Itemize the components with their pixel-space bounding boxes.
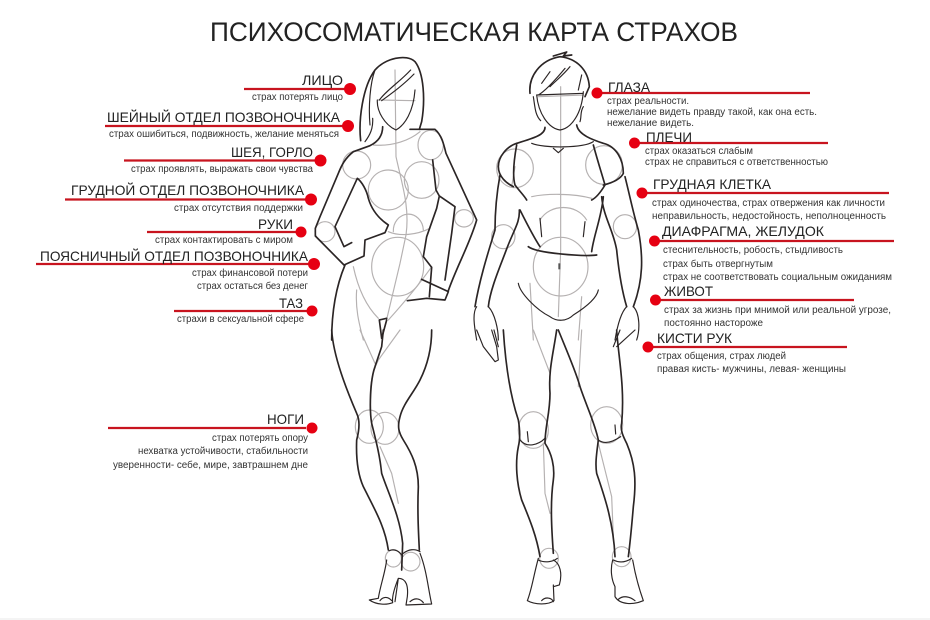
- label: лицо: [244, 72, 356, 103]
- label: руки: [147, 216, 306, 246]
- label: ноги: НОГИ: [267, 411, 304, 427]
- label: плечи: страх не справиться с ответственностью: [645, 157, 828, 168]
- label: диафрагма, желудок: стеснительность, робость, стыдливость: [663, 244, 843, 256]
- label: шейный отдел позвоночника: [105, 108, 354, 140]
- label: руки: страх контактировать с миром: [155, 235, 293, 246]
- label: шея, горло: [124, 144, 326, 175]
- label: поясничный отдел позвоночника: страх остаться без денег: [197, 280, 308, 292]
- label: таз: ТАЗ: [279, 295, 303, 311]
- label: живот: ЖИВОТ: [664, 283, 713, 299]
- label: диафрагма, желудок: страх быть отвергнутым: [663, 258, 773, 270]
- label: диафрагма, желудок: страх не соответствовать социальным ожиданиям: [663, 272, 892, 283]
- label: поясничный отдел позвоночника: страх финансовой потери: [192, 267, 308, 279]
- figure: female body sketch: [315, 58, 477, 605]
- label: глаза: нежелание видеть.: [607, 118, 694, 129]
- label: плечи: [629, 129, 828, 168]
- label: кисти рук: КИСТИ РУК: [657, 330, 733, 346]
- label: таз: страхи в сексуальной сфере: [177, 313, 304, 325]
- label: шейный отдел позвоночника: ШЕЙНЫЙ ОТДЕЛ ПОЗВОНОЧНИКА: [107, 108, 341, 125]
- label: грудная клетка: [636, 176, 889, 222]
- label: лицо: ЛИЦО: [302, 72, 343, 88]
- label: грудная клетка: ГРУДНАЯ КЛЕТКА: [653, 176, 772, 192]
- label: поясничный отдел позвоночника: ПОЯСНИЧНЫЙ ОТДЕЛ ПОЗВОНОЧНИКА: [40, 247, 309, 264]
- label: таз: [174, 295, 318, 325]
- label: руки: РУКИ: [258, 216, 293, 232]
- label: ноги: [108, 411, 318, 471]
- label: плечи: страх оказаться слабым: [645, 145, 753, 157]
- label: диафрагма, желудок: ДИАФРАГМА, ЖЕЛУДОК: [662, 223, 825, 239]
- label: шея, горло: ШЕЯ, ГОРЛО: [231, 144, 313, 160]
- label: грудной отдел позвоночника: ГРУДНОЙ ОТДЕЛ ПОЗВОНОЧНИКА: [71, 181, 305, 198]
- label: глаза: ГЛАЗА: [608, 79, 651, 95]
- label: кисти рук: [642, 330, 847, 375]
- label: грудной отдел позвоночника: [65, 181, 317, 214]
- label: шейный отдел позвоночника: страх ошибиться, подвижность, желание меняться: [109, 128, 339, 140]
- label: грудной отдел позвоночника: страх отсутствия поддержки: [174, 203, 303, 214]
- label: живот: постоянно настороже: [664, 318, 763, 329]
- label: грудная клетка: неправильность, недостойность, неполноценность: [652, 211, 886, 222]
- label: грудная клетка: страх одиночества, страх отвержения как личности: [652, 198, 885, 209]
- label: живот: [650, 283, 891, 329]
- label: живот: страх за жизнь при мнимой или реальной угрозе,: [664, 305, 891, 316]
- label: глаза: страх реальности.: [607, 96, 689, 107]
- label: глаза: нежелание видеть правду такой, как она есть.: [607, 107, 817, 118]
- label: ноги: уверенности- себе, мире, завтрашнем дне: [113, 459, 308, 471]
- label: кисти рук: правая кисть- мужчины, левая- женщины: [657, 364, 846, 375]
- title: ПСИХОСОМАТИЧЕСКАЯ КАРТА СТРАХОВ: [210, 17, 738, 47]
- label: диафрагма, желудок: [649, 223, 894, 283]
- label: шея, горло: страх проявлять, выражать свои чувства: [131, 164, 313, 175]
- label: плечи: ПЛЕЧИ: [646, 129, 692, 145]
- label: ноги: нехватка устойчивости, стабильности: [138, 445, 308, 457]
- label: глаза: [592, 79, 817, 129]
- label: поясничный отдел позвоночника: [36, 247, 320, 292]
- label: лицо: страх потерять лицо: [252, 92, 343, 103]
- label: ноги: страх потерять опору: [212, 433, 308, 444]
- label: кисти рук: страх общения, страх людей: [657, 350, 786, 362]
- figure: male body sketch: [474, 52, 643, 604]
